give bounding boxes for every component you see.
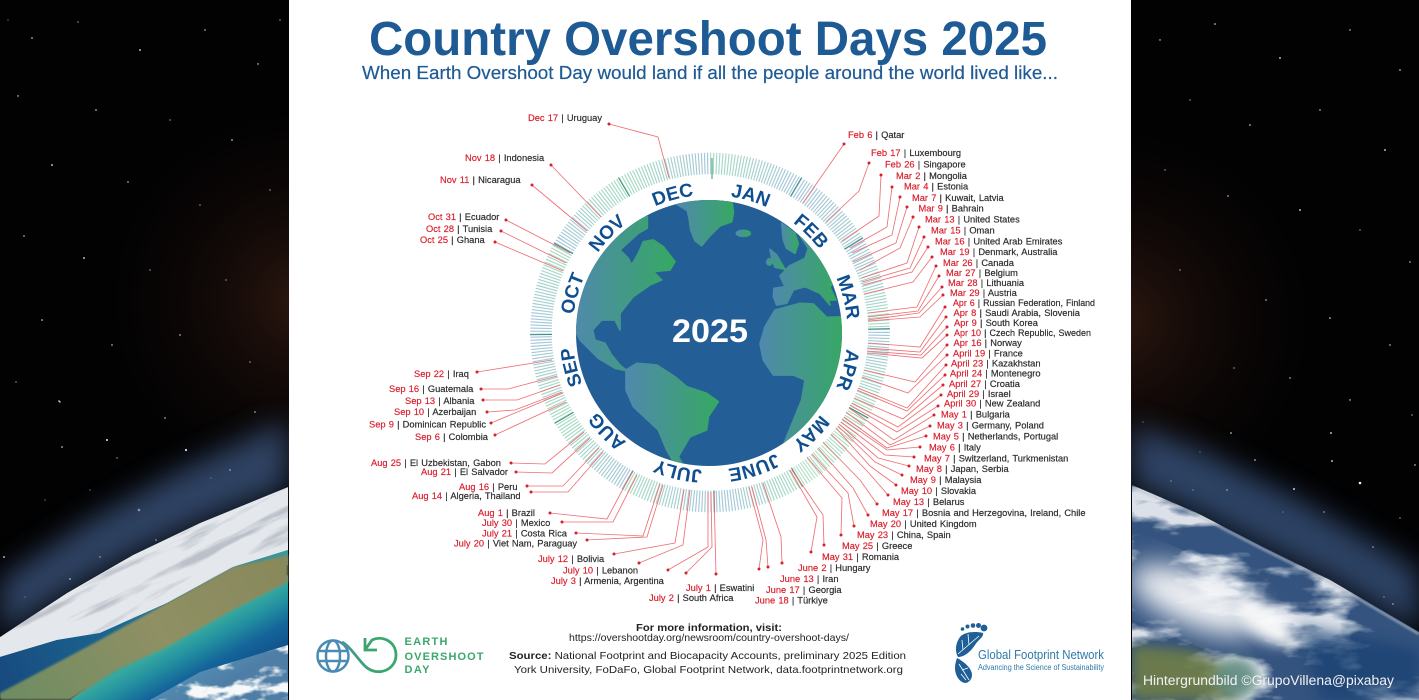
callout: July 10 Lebanon [563,490,690,576]
Europe [773,237,836,305]
callout: May 3 Germany Poland: May 3 | Germany, Poland [937,420,1044,430]
callout: Aug 21 El Salvador: Aug 21 | El Salvador [421,467,508,477]
logo wordmark: DAY [404,664,430,676]
callout: Feb 17 Luxembourg [826,148,961,222]
background: right planet [1120,425,1419,700]
callouts: left side [369,113,754,603]
callout: Mar 15 Oman [862,226,995,282]
callout: July 3 Armenia Argentina: July 3 | Armenia, Argentina [551,576,665,586]
callout: Sep 16 Guatemala [389,376,557,394]
month labels: JUNE [728,454,778,482]
callout: Mar 27 Belgium [868,268,1018,317]
Great Britain [770,249,785,269]
callout: Mar 29 Austria: Mar 29 | Austria [950,288,1018,298]
callout: Feb 17 Luxembourg: Feb 17 | Luxembourg [871,148,961,158]
cloud band left [0,487,288,657]
month labels: FEB [794,213,828,248]
callout: April 29 Israel: April 29 | Israel [947,389,1011,399]
callout: July 30 Mexico [482,475,637,528]
month labels: APR [836,349,859,390]
footer: more information and source [509,622,906,676]
callout: Mar 16 United Arab Emirates: Mar 16 | United Arab Emirates [935,236,1063,246]
month labels: MAR [836,274,860,320]
callout: Aug 25 El Uzbekistan Gabon [371,432,584,468]
logo globe icon [318,640,348,672]
caption: image credit: Hintergrundbild ©GrupoVillena@pixabay [1143,673,1394,688]
callout: April 27 Croatia [854,379,1021,419]
callout: Mar 13 United States [862,214,1020,278]
lower ocean left [70,575,288,700]
callout: July 1 Eswatini [686,493,754,593]
callout: Apr 6 Russian Federation Finland: Apr 6 | Russian Federation, Finland [953,298,1095,308]
callout: Oct 28 Tunisia [426,224,566,263]
callout: May 13 Belarus: May 13 | Belarus [893,497,965,507]
land right [1132,645,1240,700]
callout: Mar 2 Mongolia [850,171,968,248]
logo: Global Footprint Network [955,623,1105,683]
callout: May 23 China Spain [812,454,951,540]
callout: July 20 Viet Nam Paraguay: July 20 | Viet Nam, Paraguay [454,538,577,548]
callout: July 2 South Africa [649,492,734,603]
callout: May 10 Slovakia: May 10 | Slovakia [901,486,977,496]
callout: Feb 6 Qatar: Feb 6 | Qatar [848,130,904,140]
callout: Mar 2 Mongolia: Mar 2 | Mongolia [896,171,968,181]
callout: Feb 26 Singapore: Feb 26 | Singapore [885,160,966,170]
callout: Apr 9 South Korea [867,318,1039,355]
cloud masses right [1120,550,1270,650]
logo footprint icon [955,623,987,683]
callout: May 20 United Kingdom [818,448,977,529]
callout: July 20 Viet Nam Paraguay [454,485,663,548]
callout: Sep 9 Dominican Republic: Sep 9 | Dominican Republic [369,420,486,430]
callout: Aug 16 Peru: Aug 16 | Peru [459,482,518,492]
month labels: SEP [561,349,581,386]
callout: Sep 22 Iraq: Sep 22 | Iraq [414,369,469,379]
callout: Mar 19 Denmark Australia [864,247,1058,294]
callout: May 7 Switzerland Turkmenistan: May 7 | Switzerland, Turkmenistan [924,454,1068,464]
callout: Mar 26 Canada [868,258,1015,313]
callout: Mar 9 Bahrain: Mar 9 | Bahrain [918,204,984,214]
callout: Mar 29 Austria [868,288,1018,321]
callout: May 25 Greece [807,457,912,551]
globe: ocean [576,200,842,466]
callout: July 3 Armenia Argentina [551,492,708,586]
callout: May 6 Italy [842,419,981,452]
callout: June 17 Georgia [752,487,842,595]
month labels: JAN [731,184,771,207]
callout: June 13 Iran [763,483,838,584]
callout: Apr 6 Russian Federation Finland [868,298,1095,347]
callout: Sep 13 Albania: Sep 13 | Albania [405,396,475,406]
callout: Sep 22 Iraq [414,360,552,379]
callout: Feb 6 Qatar [803,130,904,203]
South America [626,363,718,467]
callout: Sep 9 Dominican Republic [369,393,563,430]
callout: May 31 Romania: May 31 | Romania [822,552,900,562]
callout: Sep 6 Colombia [415,402,566,442]
logo arrow head [365,638,377,650]
limb highlight right [1132,487,1419,634]
callout: April 27 Croatia: April 27 | Croatia [949,379,1021,389]
globe: continents [573,197,847,467]
callout: Dec 17 Uruguay: Dec 17 | Uruguay [528,113,602,123]
callout: Mar 27 Belgium: Mar 27 | Belgium [946,268,1018,278]
atmosphere glow right [1132,425,1419,632]
callout: April 30 New Zealand: April 30 | New Zealand [944,398,1040,408]
callout: July 1 Eswatini: July 1 | Eswatini [686,583,754,593]
callout: July 21 Costa Rica: July 21 | Costa Rica [482,528,568,538]
upper ocean left [0,540,288,698]
callout: Mar 13 United States: Mar 13 | United States [925,214,1020,224]
callout: Aug 16 Peru [459,448,599,492]
callout: April 30 New Zealand [850,398,1040,432]
month labels: DEC [652,184,693,206]
Iceland [736,230,750,236]
callout: Apr 9 South Korea: Apr 9 | South Korea [954,318,1039,328]
callout: Mar 28 Lithuania: Mar 28 | Lithuania [948,278,1025,288]
callout: May 20 United Kingdom: May 20 | United Kingdom [870,519,977,529]
callout: Mar 15 Oman: Mar 15 | Oman [931,226,995,236]
callout: Sep 10 Azerbaijan [394,392,562,417]
callout: Aug 14 Algeria Thailand [412,452,603,501]
logo wordmark: Global Footprint Network [978,647,1105,662]
footer: more information and source: Source: National Footprint and Biocapacity Accounts, preliminary 2025 Edition [509,650,906,662]
month labels: MAY [796,416,830,453]
Ireland [767,259,772,265]
calendar ring: month boundary ticks [530,158,890,512]
callout: Oct 25 Ghana [420,235,563,271]
callout: Apr 8 Saudi Arabia Slovenia: Apr 8 | Saudi Arabia, Slovenia [954,308,1081,318]
callout: April 29 Israel [852,389,1011,427]
callout: April 23 Kazakhstan: April 23 | Kazakhstan [951,358,1040,368]
callout: April 24 Montenegro [857,368,1041,411]
subtitle: When Earth Overshoot Day would land if all the people around the world lived like... [362,63,1058,83]
callout: May 17 Bosnia and Herzegovina Ireland Chile: May 17 | Bosnia and Herzegovina, Ireland, Chile [882,508,1086,518]
sea right [1214,658,1258,698]
callout: April 19 France [862,348,1023,393]
callout: May 8 Japan Serbia [839,424,1010,474]
callout: Dec 17 Uruguay [528,113,669,178]
callout: Mar 9 Bahrain [860,204,984,270]
callout: May 1 Bulgaria [849,408,1011,440]
logo loop arrow icon [342,638,396,672]
callout: July 12 Bolivia [538,490,684,564]
callout: Oct 31 Ecuador [428,212,570,253]
logo wordmark [404,636,484,676]
month labels: NOV [588,213,622,252]
callout: Aug 1 Brazil [478,472,632,519]
Scandinavia [782,223,798,253]
callout: Mar 16 United Arab Emirates [863,236,1063,285]
callout: Sep 6 Colombia: Sep 6 | Colombia [415,432,489,442]
callout: Aug 21 El Salvador [421,438,590,477]
callout: Sep 16 Guatemala: Sep 16 | Guatemala [389,384,474,394]
callout: May 8 Japan Serbia: May 8 | Japan, Serbia [916,464,1010,474]
callout: Apr 10 Czech Republic Sweden: Apr 10 | Czech Republic, Sweden [954,328,1091,338]
Greenland [677,197,733,246]
land strip left [0,555,288,700]
callout: April 19 France: April 19 | France [953,348,1023,358]
callout: Aug 25 El Uzbekistan Gabon: Aug 25 | El Uzbekistan, Gabon [371,458,501,468]
callout: May 25 Greece: May 25 | Greece [842,541,912,551]
callout: Nov 18 Indonesia: Nov 18 | Indonesia [465,153,545,163]
atmosphere glow left [0,420,288,637]
callouts: right side [749,130,1095,606]
callout: July 10 Lebanon: July 10 | Lebanon [563,566,638,576]
callout: July 30 Mexico: July 30 | Mexico [482,518,550,528]
callout: May 6 Italy: May 6 | Italy [929,442,981,452]
callout: Oct 25 Ghana: Oct 25 | Ghana [420,235,486,245]
callout: May 5 Netherlands Portugal: May 5 | Netherlands, Portugal [933,432,1058,442]
callout: Mar 7 Kuwait Latvia [853,193,1004,262]
callout: July 2 South Africa: July 2 | South Africa [649,593,734,603]
month labels: OCT [562,272,583,313]
callout: June 13 Iran: June 13 | Iran [780,574,838,584]
callout: May 1 Bulgaria: May 1 | Bulgaria [941,410,1011,420]
North America [573,217,675,371]
month labels: AUG [590,414,626,449]
callout: Mar 28 Lithuania [868,278,1025,320]
callout: Mar 4 Estonia: Mar 4 | Estonia [904,182,969,192]
callout: Mar 7 Kuwait Latvia: Mar 7 | Kuwait, Latvia [912,193,1004,203]
callout: Nov 18 Indonesia [465,153,601,217]
callout: Sep 13 Albania [405,385,560,406]
callout: May 7 Switzerland Turkmenistan [841,422,1068,464]
callout: June 2 Hungary: June 2 | Hungary [798,563,871,573]
month labels: JULY [652,461,702,482]
title: Country Overshoot Days 2025 [369,13,1047,66]
callout: May 10 Slovakia [836,428,977,496]
callout: May 9 Malaysia: May 9 | Malaysia [910,475,982,485]
footer: more information and source: https://overshootday.org/newsroom/country-overshoot-days/ [569,632,849,644]
background: left planet [0,420,320,700]
deep ocean right [1300,625,1419,700]
callout: June 18 Türkiye [749,487,828,606]
globe: year label: 2025 [672,313,748,349]
month labels [561,184,860,482]
calendar ring: daily ticks [541,164,879,502]
callout: May 23 China Spain: May 23 | China, Spain [857,530,951,540]
callout: Feb 26 Singapore [842,160,966,241]
callout: Aug 1 Brazil: Aug 1 | Brazil [478,508,535,518]
panel: white infographic card [289,0,1131,700]
callout: Apr 16 Norway [864,338,1022,382]
callout: Mar 4 Estonia [852,182,969,253]
callout: Aug 14 Algeria Thailand: Aug 14 | Algeria, Thailand [412,491,521,501]
logo wordmark: OVERSHOOT [404,651,484,663]
callout: May 31 Romania [792,470,900,562]
callout: May 9 Malaysia [838,426,982,485]
callout: Oct 28 Tunisia: Oct 28 | Tunisia [426,224,493,234]
callout: July 12 Bolivia: July 12 | Bolivia [538,554,605,564]
callout: May 5 Netherlands Portugal [844,417,1058,448]
logo: Global Footprint Network: Advancing the Science of Sustainability [978,663,1104,672]
callout: Nov 11 Nicaragua: Nov 11 | Nicaragua [440,175,521,185]
callout: May 17 Bosnia and Herzegovina Ireland Chile [823,442,1086,518]
callout: Apr 10 Czech Republic Sweden [867,328,1091,358]
callout: Oct 31 Ecuador: Oct 31 | Ecuador [428,212,499,222]
globe [573,197,847,467]
callout: Sep 10 Azerbaijan: Sep 10 | Azerbaijan [394,407,476,417]
callout: June 18 Türkiye: June 18 | Türkiye [755,596,828,606]
callout: July 21 Costa Rica [482,484,660,538]
callout: Nov 11 Nicaragua [440,175,587,231]
Africa [760,303,847,443]
callout: June 17 Georgia: June 17 | Georgia [766,585,842,595]
footer: more information and source: York University, FoDaFo, Global Footprint Network, data.footprintnetwork.org [514,664,903,676]
logo: Earth Overshoot Day [318,636,484,676]
callout: June 2 Hungary [790,470,871,573]
callout: May 3 Germany Poland [846,412,1044,445]
callout: April 23 Kazakhstan [858,358,1040,408]
callout: Mar 19 Denmark Australia: Mar 19 | Denmark, Australia [940,247,1058,257]
clouds lower right left panel [150,645,288,700]
callout: Mar 26 Canada: Mar 26 | Canada [943,258,1015,268]
background: space right [1131,0,1419,700]
callout: May 13 Belarus [831,434,965,507]
callout: Apr 16 Norway: Apr 16 | Norway [954,338,1022,348]
logo wordmark: EARTH [404,636,448,648]
background: space left [0,0,289,700]
callout: April 24 Montenegro: April 24 | Montenegro [950,368,1041,378]
footer: more information and source: For more information, visit: [636,622,782,634]
callout: Apr 8 Saudi Arabia Slovenia [867,308,1081,352]
